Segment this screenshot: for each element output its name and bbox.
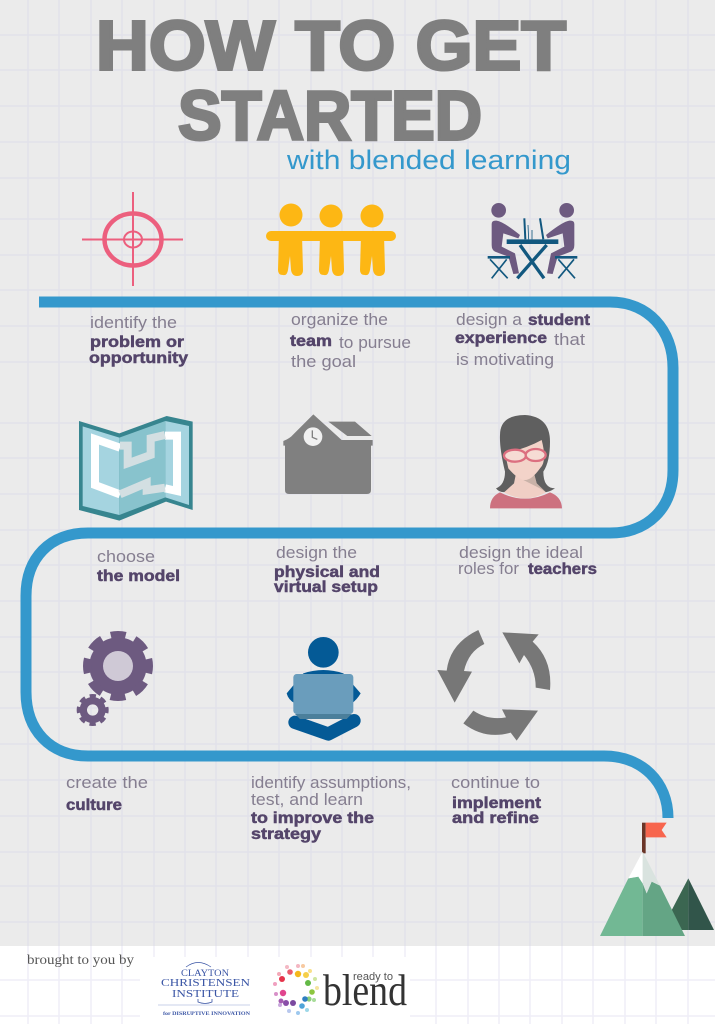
icon: building with clock	[283, 414, 373, 494]
text: continue to implement and refine: continue to	[451, 774, 540, 792]
icon: target	[82, 192, 183, 286]
step 2: organize the team	[266, 204, 411, 371]
text: identify assumptions, test, and learn to improve the strategy: strategy	[251, 826, 321, 843]
text: choose the model: choose	[97, 548, 155, 566]
text: design the ideal roles for teachers: teachers	[528, 561, 597, 578]
text: organize the team to pursue the goal	[290, 311, 411, 371]
text: continue to implement and refine	[451, 774, 542, 827]
logo: Clayton Christensen Institute: CLAYTON	[181, 969, 229, 979]
icon: mountain with flag	[600, 823, 714, 936]
text: design a student experience that is motivating: is motivating	[456, 351, 554, 369]
text: continue to implement and refine: implement	[452, 795, 542, 812]
logo mark: coloured dot ring	[273, 964, 319, 1015]
step 1: identify the problem	[82, 192, 188, 367]
text: design the ideal roles for teachers: design the ideal	[459, 544, 583, 562]
text: design a student experience that is motivating: student	[528, 312, 591, 329]
logo backing panel	[140, 957, 410, 1024]
step 3: design a student experience	[455, 203, 591, 369]
logo wordmark: blend	[323, 966, 407, 1015]
step 8: identify assumptions, test, and learn	[251, 637, 411, 843]
text: organize the team to pursue the goal: to pursue	[339, 334, 411, 352]
icon: gears	[78, 635, 149, 724]
text: continue to implement and refine: and refine	[452, 810, 539, 827]
icon: cycle arrows	[437, 630, 550, 741]
title: STARTED	[178, 76, 482, 154]
text: design a student experience that is motivating: design a	[456, 311, 523, 329]
subtitle: with blended learning	[286, 145, 571, 175]
logo wordmark: ready to	[353, 971, 393, 983]
text: create the culture: culture	[66, 797, 122, 814]
text: design a student experience that is motivating	[455, 311, 591, 369]
icon: three people	[266, 204, 396, 276]
text: organize the team to pursue the goal: organize the	[291, 311, 388, 329]
text: identify the problem or opportunity: problem or	[90, 334, 184, 351]
text: design the physical and virtual setup: virtual setup	[274, 579, 378, 596]
text: design a student experience that is motivating: experience	[455, 330, 547, 347]
step 5: design the physical and virtual setup	[274, 414, 380, 596]
title	[96, 6, 566, 154]
logo: Clayton Christensen Institute: for DISRUPTIVE INNOVATION	[163, 1011, 250, 1017]
icon: person with laptop	[287, 637, 361, 734]
logo: Clayton Christensen Institute: CHRISTENSEN	[161, 977, 250, 989]
text: choose the model: the model	[97, 568, 180, 585]
text: identify assumptions, test, and learn to improve the strategy: test, and learn	[251, 791, 363, 809]
icon: teacher portrait	[490, 415, 562, 508]
step 4: choose the model	[79, 416, 193, 585]
logo: Clayton Christensen Institute	[158, 962, 250, 1017]
text: create the culture	[66, 774, 148, 814]
text: identify the problem or opportunity: opportunity	[89, 350, 188, 367]
icon: students at table	[488, 203, 577, 278]
text: organize the team to pursue the goal: the goal	[291, 353, 356, 371]
logo: Clayton Christensen Institute: INSTITUTE	[172, 988, 239, 1000]
footer credit text: brought to you by	[27, 952, 134, 967]
icon: folded map	[79, 416, 193, 521]
step 9: continue to implement and refine	[437, 630, 550, 827]
text: design the ideal roles for teachers	[458, 544, 597, 578]
text: identify assumptions, test, and learn to improve the strategy: to improve the	[251, 810, 374, 827]
footer band	[0, 946, 715, 1024]
text: create the culture: create the	[66, 774, 148, 792]
step 6: design the ideal roles for teachers	[458, 415, 597, 578]
text: identify the problem or opportunity: identify the	[90, 314, 177, 332]
text: design the physical and virtual setup: design the	[276, 544, 357, 562]
title: HOW TO GET	[96, 6, 566, 84]
winding blue path	[26, 302, 673, 818]
text: choose the model	[97, 548, 180, 585]
text: identify assumptions, test, and learn to improve the strategy: identify assumptions,	[251, 774, 411, 792]
text: design the ideal roles for teachers: roles for	[458, 560, 520, 578]
text: identify the problem or opportunity	[89, 314, 188, 367]
text: design a student experience that is motivating: that	[554, 331, 585, 349]
logo: ready to blend	[273, 964, 407, 1015]
step 7: create the culture	[66, 635, 149, 814]
text: design the physical and virtual setup: physical and	[274, 564, 380, 581]
text: design the physical and virtual setup	[274, 544, 380, 596]
text: organize the team to pursue the goal: team	[290, 333, 332, 350]
text: identify assumptions, test, and learn to improve the strategy	[251, 774, 411, 843]
